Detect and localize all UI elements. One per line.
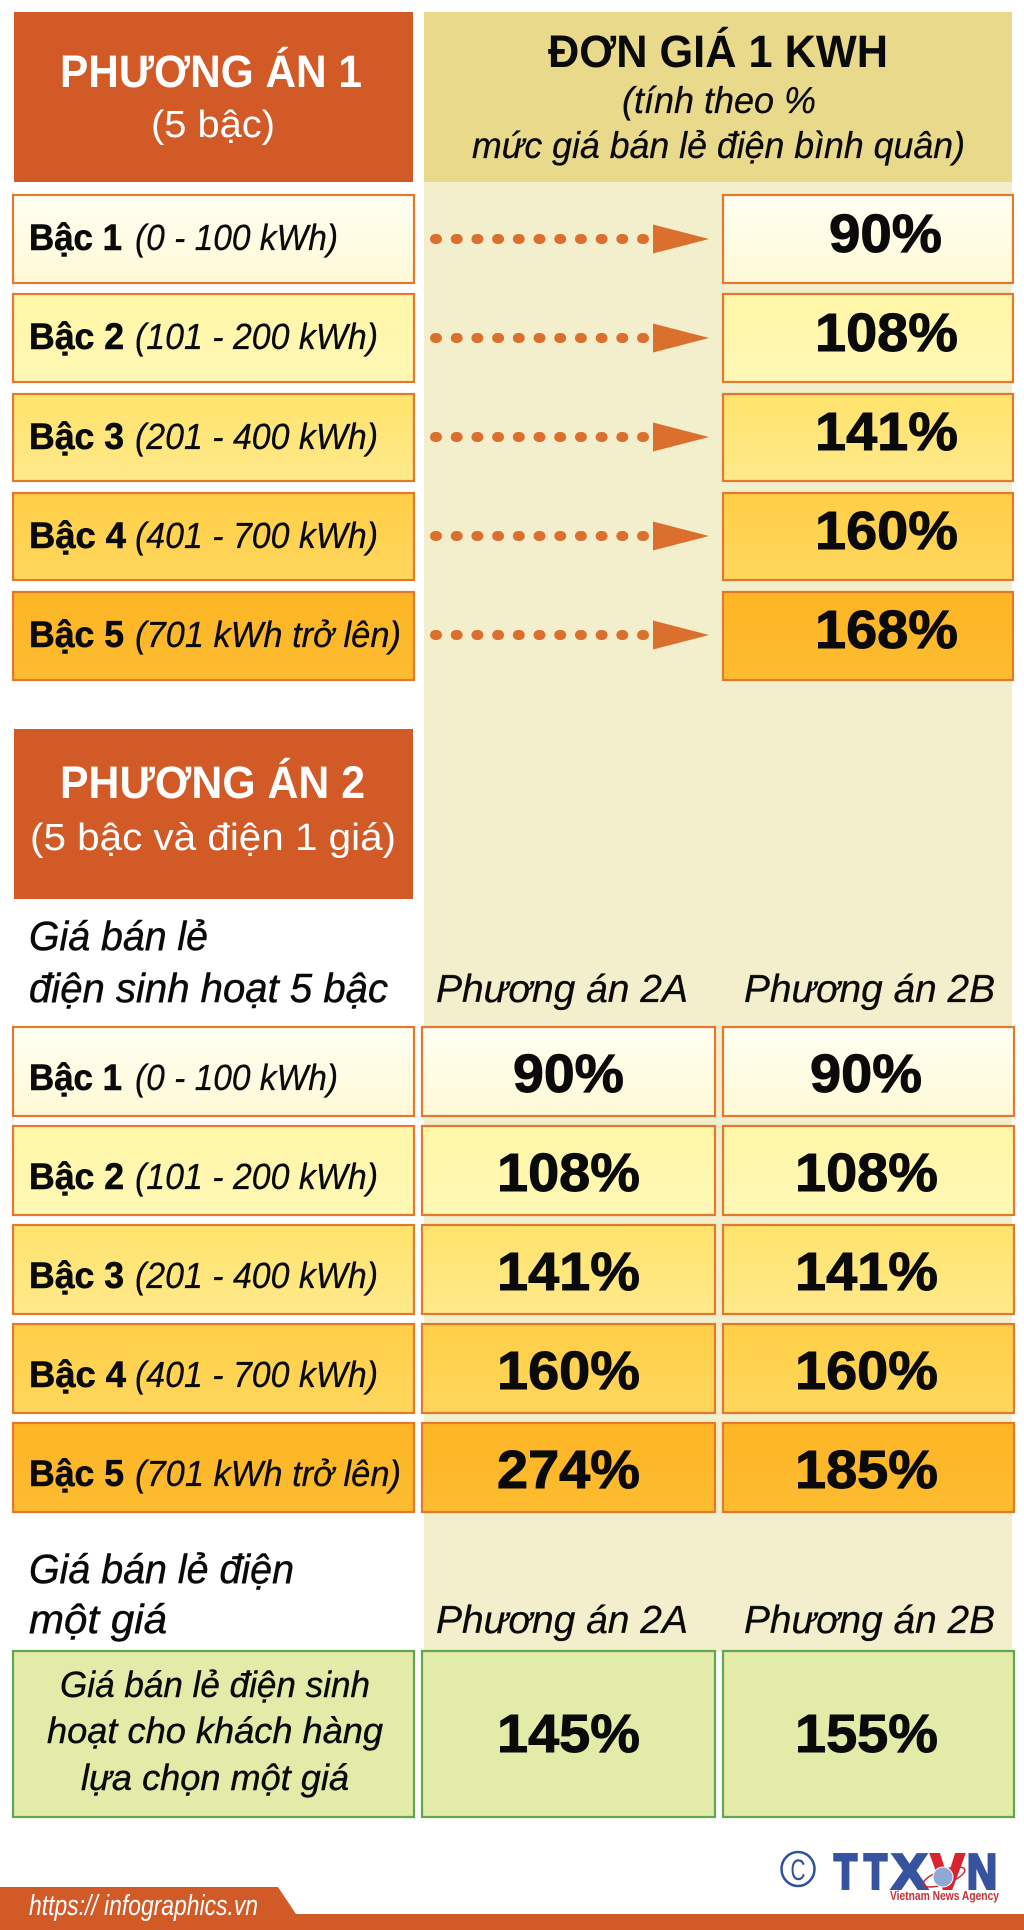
panel: option 2A tier 4 value: 160% bbox=[497, 1341, 640, 1401]
panel: option 2A tier 5 value: 274% bbox=[497, 1440, 640, 1500]
panel: option 1 tier 5: Bậc 5 bbox=[29, 614, 124, 655]
panel: option 1 tier 5 value bbox=[723, 592, 1013, 680]
panel: option 2A single price value bbox=[422, 1651, 715, 1817]
panel: single price description: lựa chọn một giá bbox=[81, 1757, 349, 1798]
panel: single price description bbox=[13, 1651, 414, 1817]
panel: option 1 tier 2: (101 - 200 kWh) bbox=[135, 316, 378, 357]
panel: option 2 header: (5 bậc và điện 1 giá) bbox=[30, 817, 396, 859]
panel: single price description: hoạt cho khách hàng bbox=[47, 1710, 383, 1751]
logo: TTXVN: N bbox=[967, 1846, 997, 1900]
heading: single price retail: một giá bbox=[29, 1596, 167, 1642]
panel: option 2A tier 4 value bbox=[422, 1324, 715, 1413]
panel: option 2B tier 1 value bbox=[723, 1027, 1014, 1116]
arrow: tier 5 bbox=[435, 620, 709, 650]
panel: option 1 tier 4 value: 160% bbox=[815, 501, 958, 561]
footer: website band bbox=[0, 1887, 1024, 1930]
panel: option 2 tier 5 bbox=[13, 1423, 414, 1512]
panel: single price description: Giá bán lẻ điện sinh bbox=[60, 1664, 370, 1705]
panel: option 1 tier 1 bbox=[13, 195, 414, 283]
panel: option 1 tier 3: (201 - 400 kWh) bbox=[135, 416, 378, 457]
panel: option 1 header: (5 bậc) bbox=[151, 104, 275, 146]
panel: option 2 tier 2 bbox=[13, 1126, 414, 1215]
panel: option 1 tier 5: (701 kWh trở lên) bbox=[135, 614, 401, 655]
panel: option 1 tier 3 value: 141% bbox=[815, 402, 958, 462]
panel: option 2B single price value bbox=[723, 1651, 1014, 1817]
panel: unit price header: ĐƠN GIÁ 1 KWH bbox=[548, 26, 888, 77]
panel: option 2 tier 5: (701 kWh trở lên) bbox=[135, 1453, 401, 1494]
panel: unit price header bbox=[424, 12, 1012, 182]
panel: option 1 tier 5 value: 168% bbox=[815, 600, 958, 660]
logo: TTXVN bbox=[834, 1846, 1000, 1903]
panel: option 2B tier 3 value: 141% bbox=[795, 1242, 938, 1302]
panel: option 2A tier 5 value bbox=[422, 1423, 715, 1512]
panel: option 2 tier 4 bbox=[13, 1324, 414, 1413]
panel: option 1 tier 4: Bậc 4 bbox=[29, 515, 126, 556]
footer: website band: https:// infographics.vn bbox=[29, 1890, 258, 1922]
panel: unit price header: (tính theo % bbox=[622, 80, 816, 121]
panel: option 1 tier 1: Bậc 1 bbox=[29, 217, 122, 258]
panel: option 1 header: PHƯƠNG ÁN 1 bbox=[60, 46, 362, 97]
panel: option 1 tier 2 value: 108% bbox=[815, 303, 958, 363]
panel: option 2A tier 3 value: 141% bbox=[497, 1242, 640, 1302]
panel: option 1 tier 4 bbox=[13, 493, 414, 580]
panel: option 1 tier 1 value: 90% bbox=[829, 204, 942, 264]
heading: five tier retail price: Giá bán lẻ bbox=[29, 913, 208, 959]
panel: option 2 tier 3: (201 - 400 kWh) bbox=[135, 1255, 378, 1296]
panel: option 2B tier 2 value: 108% bbox=[795, 1143, 938, 1203]
panel: option 2B tier 4 value: 160% bbox=[795, 1341, 938, 1401]
panel: option 1 header bbox=[14, 12, 413, 182]
arrow: tier 1 bbox=[435, 224, 709, 254]
panel: option 2A tier 1 value: 90% bbox=[513, 1044, 624, 1104]
logo: TTXVN: V bbox=[931, 1846, 964, 1900]
panel: option 2 tier 2: Bậc 2 bbox=[29, 1156, 124, 1197]
heading: option 2A column: Phương án 2A bbox=[436, 968, 688, 1011]
panel: price column background bbox=[424, 182, 1012, 1652]
panel: option 2B tier 2 value bbox=[723, 1126, 1014, 1215]
heading: single price retail bbox=[29, 1546, 294, 1642]
panel: option 2B tier 5 value: 185% bbox=[795, 1440, 938, 1500]
panel: option 1 tier 1: (0 - 100 kWh) bbox=[135, 217, 338, 258]
panel: option 1 tier 4: (401 - 700 kWh) bbox=[135, 515, 378, 556]
panel: option 1 tier 3 value bbox=[723, 394, 1013, 481]
panel: option 2 tier 4: Bậc 4 bbox=[29, 1354, 126, 1395]
panel: option 2 tier 3: Bậc 3 bbox=[29, 1255, 124, 1296]
panel: option 1 tier 2 value bbox=[723, 294, 1013, 382]
panel: option 2 tier 1: (0 - 100 kWh) bbox=[135, 1057, 338, 1098]
panel: unit price header: mức giá bán lẻ điện bình quân) bbox=[472, 125, 965, 166]
panel: option 2 tier 1 bbox=[13, 1027, 414, 1116]
panel: option 2A tier 1 value bbox=[422, 1027, 715, 1116]
arrow: tier 4 bbox=[435, 522, 709, 550]
logo: TTXVN: Vietnam News Agency bbox=[890, 1888, 1000, 1903]
heading: option 2B column, single price: Phương án 2B bbox=[744, 1599, 995, 1642]
panel: option 1 tier 2: Bậc 2 bbox=[29, 316, 124, 357]
panel: option 2A tier 2 value bbox=[422, 1126, 715, 1215]
panel: option 2B single price value: 155% bbox=[795, 1704, 938, 1764]
panel: option 1 tier 2 bbox=[13, 294, 414, 382]
panel: option 2 tier 2: (101 - 200 kWh) bbox=[135, 1156, 378, 1197]
panel: option 2B tier 3 value bbox=[723, 1225, 1014, 1314]
heading: single price retail: Giá bán lẻ điện bbox=[29, 1546, 294, 1592]
heading: five tier retail price: điện sinh hoạt 5 bậc bbox=[29, 965, 388, 1011]
panel: option 2 tier 1: Bậc 1 bbox=[29, 1057, 122, 1098]
panel: option 2 header bbox=[14, 729, 413, 899]
icon: copyright mark bbox=[782, 1852, 814, 1887]
panel: option 2 tier 4: (401 - 700 kWh) bbox=[135, 1354, 378, 1395]
panel: option 2A single price value: 145% bbox=[497, 1704, 640, 1764]
heading: option 2B column: Phương án 2B bbox=[744, 968, 995, 1011]
icon: copyright mark: C bbox=[790, 1854, 806, 1887]
panel: option 2A tier 3 value bbox=[422, 1225, 715, 1314]
arrow: tier 2 bbox=[435, 324, 709, 352]
panel: option 2 tier 3 bbox=[13, 1225, 414, 1314]
panel: option 2 tier 5: Bậc 5 bbox=[29, 1453, 124, 1494]
panel: option 1 tier 5 bbox=[13, 592, 414, 680]
logo: TTXVN: X bbox=[892, 1846, 927, 1900]
panel: option 1 tier 1 value bbox=[723, 195, 1013, 283]
panel: option 2A tier 2 value: 108% bbox=[497, 1143, 640, 1203]
panel: option 1 tier 3: Bậc 3 bbox=[29, 416, 124, 457]
heading: option 2A column, single price: Phương án 2A bbox=[436, 1599, 688, 1642]
arrow: tier 3 bbox=[435, 422, 709, 452]
logo: TTXVN: T bbox=[864, 1846, 887, 1900]
panel: option 1 tier 4 value bbox=[723, 493, 1013, 580]
panel: option 2B tier 1 value: 90% bbox=[810, 1044, 922, 1104]
logo: TTXVN: T bbox=[834, 1846, 857, 1900]
heading: five tier retail price bbox=[29, 913, 388, 1011]
panel: option 2B tier 4 value bbox=[723, 1324, 1014, 1413]
panel: option 2 header: PHƯƠNG ÁN 2 bbox=[60, 757, 365, 808]
panel: option 2B tier 5 value bbox=[723, 1423, 1014, 1512]
panel: option 1 tier 3 bbox=[13, 394, 414, 481]
